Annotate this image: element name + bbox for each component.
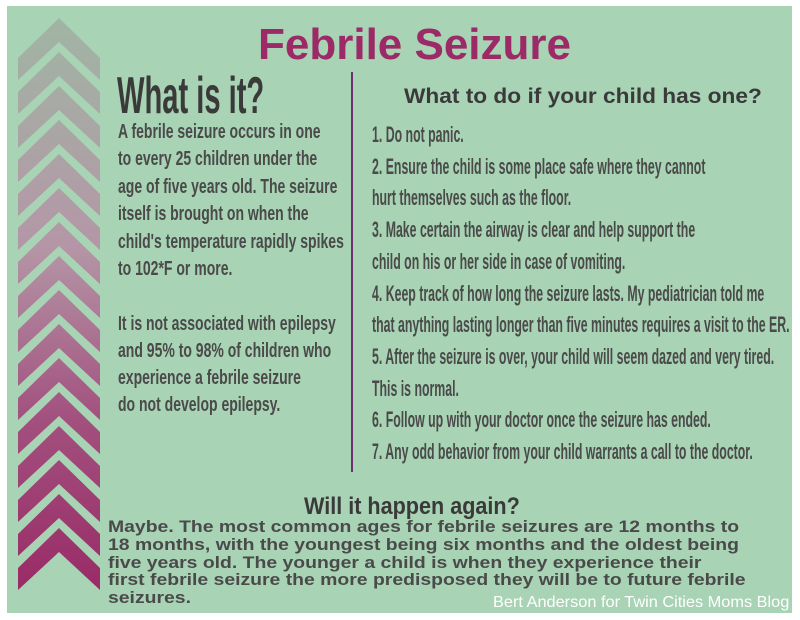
chevron stack decoration <box>18 18 100 590</box>
list: steps: child on his or her side in case of vomiting. <box>372 249 625 274</box>
text block: what is it: age of five years old. The seizure <box>118 176 337 198</box>
list: steps: 2. Ensure the child is some place safe where they cannot <box>372 154 705 179</box>
heading: what to do: What to do if your child has one? <box>404 85 762 108</box>
title: Febrile Seizure <box>258 20 571 69</box>
text block: what is it: It is not associated with epilepsy <box>118 313 336 335</box>
list: steps: that anything lasting longer than five minutes requires a visit to the ER. <box>372 312 790 337</box>
text block: what is it: to 102*F or more. <box>118 258 232 280</box>
text block: what is it: itself is brought on when the <box>118 203 309 225</box>
text block: will it happen again: five years old. The younger a child is when they experience their <box>108 553 701 572</box>
list: steps: 1. Do not panic. <box>372 122 464 147</box>
list: steps: 3. Make certain the airway is clear and help support the <box>372 217 695 242</box>
list: steps: This is normal. <box>372 376 459 401</box>
heading: what is it: What is it? <box>117 67 264 125</box>
text block: what is it: do not develop epilepsy. <box>118 394 280 416</box>
text block: what is it: child's temperature rapidly spikes <box>118 231 344 253</box>
list: steps: hurt themselves such as the floor. <box>372 185 571 210</box>
text block: will it happen again: first febrile seizure the more predisposed they will be to future febrile <box>108 570 746 589</box>
text block: what is it <box>118 121 344 416</box>
list: steps: 4. Keep track of how long the seizure lasts. My pediatrician told me <box>372 280 764 306</box>
list: steps: 7. Any odd behavior from your child warrants a call to the doctor. <box>372 439 753 464</box>
heading: will it happen again: Will it happen again? <box>304 493 520 520</box>
text block: will it happen again <box>108 517 746 607</box>
text block: what is it: A febrile seizure occurs in one <box>118 121 321 143</box>
list: steps: 6. Follow up with your doctor once the seizure has ended. <box>372 407 711 432</box>
text block: what is it: to every 25 children under the <box>118 148 317 170</box>
text block: what is it: experience a febrile seizure <box>118 367 301 389</box>
text block: will it happen again: Maybe. The most common ages for febrile seizures are 12 months to <box>108 517 739 536</box>
credit: Bert Anderson for Twin Cities Moms Blog <box>493 594 789 611</box>
text block: will it happen again: 18 months, with the youngest being six months and the oldest being <box>108 535 739 554</box>
list: steps: 5. After the seizure is over, your child will seem dazed and very tired. <box>372 344 774 369</box>
divider <box>351 72 353 472</box>
list: steps <box>372 122 790 464</box>
text block: will it happen again: seizures. <box>108 588 191 607</box>
text block: what is it: and 95% to 98% of children who <box>118 340 331 362</box>
